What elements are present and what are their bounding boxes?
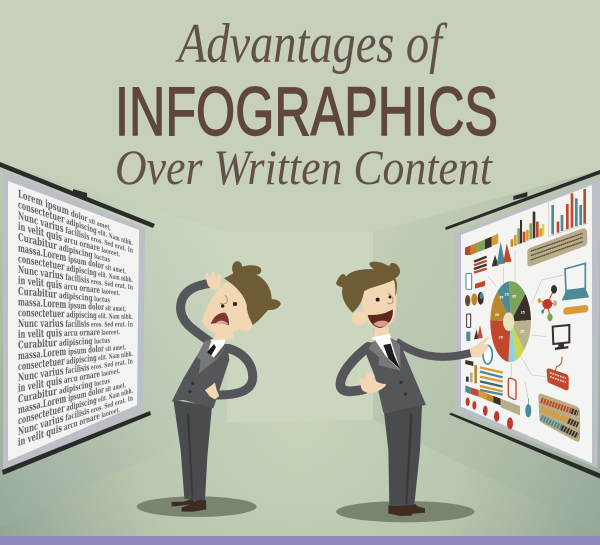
eyes	[376, 298, 380, 302]
lower left charts	[465, 360, 503, 395]
mouth	[211, 313, 229, 325]
title line: Advantages of: Advantages of	[175, 13, 448, 75]
pie chart: 25	[505, 293, 509, 297]
lorem ipsum paragraph: Curabitur adipiscing luctus	[18, 373, 110, 406]
pie chart: 25	[520, 330, 524, 334]
chart: staircase bars	[511, 212, 544, 247]
lapels	[368, 337, 401, 371]
chart: top right thin bars	[548, 189, 588, 237]
right projection screen with infographic	[445, 170, 600, 479]
forehead hand	[205, 272, 221, 290]
title	[115, 13, 498, 195]
mouse icon	[525, 398, 531, 417]
text banner	[527, 228, 587, 266]
head	[202, 261, 281, 341]
shirt and tie	[372, 334, 401, 370]
screen bottom rail	[2, 411, 151, 475]
jacket buttons	[399, 381, 407, 396]
pie chart	[490, 281, 531, 362]
lapels	[197, 341, 226, 374]
shirt and tie	[198, 338, 226, 371]
pie chart: 35	[499, 336, 503, 340]
lorem ipsum paragraph: massa.Lorem ipsum dolor sit amet,	[18, 296, 126, 314]
lorem ipsum paragraph: in velit quis arcu ornare laoreet.	[18, 364, 120, 395]
eyes	[221, 304, 224, 308]
lorem ipsum paragraph: Nunc varius facilisis eros. Sed erat. In	[18, 209, 133, 256]
head	[336, 262, 400, 329]
keyboard icon	[547, 357, 569, 390]
chart: triangles	[492, 242, 512, 267]
hair	[336, 262, 400, 313]
pie chart: 25	[521, 310, 525, 314]
arm on hip	[216, 348, 253, 395]
pointing man	[336, 262, 489, 522]
ribbon	[465, 233, 498, 255]
jacket	[172, 344, 229, 408]
network icon	[538, 285, 557, 321]
floor shadow	[137, 496, 257, 517]
lorem ipsum paragraph: Lorem ipsum dolor sit amet,	[18, 187, 111, 233]
title line: Over Written Content: Over Written Content	[115, 139, 493, 195]
pie chart: 35	[499, 295, 503, 299]
pie chart: 35	[512, 294, 516, 298]
phone icon	[508, 378, 516, 399]
trousers	[384, 405, 422, 506]
lorem ipsum paragraph: consectetuer adipiscing elit. Nam nibh.	[18, 307, 133, 322]
hair	[224, 261, 281, 325]
monitor icon	[553, 325, 569, 350]
nose	[220, 295, 227, 304]
lorem ipsum paragraph: in velit quis arcu ornare laoreet.	[18, 275, 120, 298]
bottom purple band	[0, 536, 600, 545]
gesturing arm	[340, 347, 368, 391]
neck	[373, 327, 390, 338]
connector lines	[488, 250, 563, 400]
device icons left	[465, 273, 485, 341]
nose	[387, 293, 393, 304]
pie chart: 25	[495, 313, 499, 317]
lorem ipsum paragraph: massa.Lorem ipsum dolor sit amet,	[18, 377, 126, 417]
orange button	[563, 305, 588, 315]
lorem ipsum paragraph: Nunc varius facilisis eros. Sed erat. In	[18, 390, 133, 438]
lorem ipsum paragraph: Nunc varius facilisis eros. Sed erat. In	[18, 264, 133, 293]
open hand	[359, 372, 386, 393]
shoes	[388, 503, 425, 516]
ribbon timeline with pins	[465, 385, 520, 429]
jacket buttons	[188, 382, 194, 393]
pointing hand	[469, 336, 489, 357]
lorem ipsum paragraph: massa.Lorem ipsum dolor sit amet,	[18, 340, 126, 362]
abacus of people	[538, 394, 580, 442]
screen bottom rail	[449, 413, 600, 479]
lorem ipsum paragraph: consectetuer adipiscing elit. Nam nibh.	[18, 198, 133, 248]
trousers	[173, 400, 212, 501]
lorem ipsum paragraph: in velit quis arcu ornare laoreet.	[18, 220, 120, 260]
floor shadow	[336, 501, 475, 522]
lorem ipsum paragraph: consectetuer adipiscing elit. Nam nibh.	[18, 347, 133, 373]
list lines	[474, 257, 487, 273]
lorem ipsum paragraph: consectetuer adipiscing elit. Nam nibh.	[18, 383, 133, 427]
raised arm	[181, 283, 211, 342]
lorem ipsum paragraph: in velit quis arcu ornare laoreet.	[18, 325, 120, 341]
lorem ipsum paragraph: massa.Lorem ipsum dolor sit amet,	[18, 241, 126, 276]
lorem ipsum paragraph: consectetuer adipiscing elit. Nam nibh.	[18, 253, 133, 285]
hip hand	[205, 383, 219, 399]
lorem ipsum paragraph: Nunc varius facilisis eros. Sed erat. In	[18, 317, 133, 330]
lorem ipsum paragraph	[18, 187, 133, 449]
confused man	[137, 261, 281, 517]
screen top rail	[0, 162, 155, 228]
left projection screen with written text	[0, 162, 155, 475]
shoes	[172, 499, 206, 512]
lorem ipsum paragraph: Curabitur adipiscing luctus	[18, 286, 110, 305]
laptop icon	[562, 263, 589, 301]
lorem ipsum paragraph: Curabitur adipiscing luctus	[18, 230, 110, 265]
jacket	[365, 337, 426, 413]
pointing arm	[396, 342, 471, 357]
lorem ipsum paragraph: Curabitur adipiscing luctus	[18, 334, 110, 352]
lorem ipsum paragraph: in velit quis arcu ornare laoreet.	[18, 402, 120, 449]
globe icon	[483, 345, 492, 364]
lorem ipsum paragraph: Nunc varius facilisis eros. Sed erat. In	[18, 354, 133, 384]
screen top rail	[445, 170, 600, 230]
mouth	[368, 309, 393, 328]
